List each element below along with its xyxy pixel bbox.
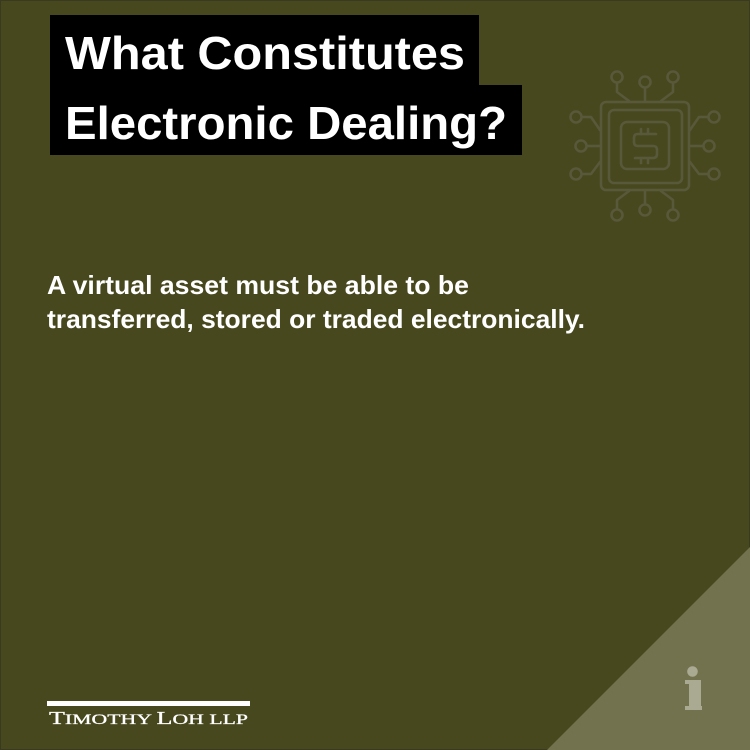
title: Electronic Dealing? — [65, 97, 507, 149]
corner triangle — [547, 547, 750, 750]
logo: Timothy Loh LLP: T IMOTHY L OH LLP — [49, 708, 248, 728]
logo: Timothy Loh LLP — [47, 701, 250, 728]
icon: microchip with dollar sign — [570, 72, 720, 220]
body text — [47, 270, 585, 334]
icon: information letter i — [685, 666, 702, 710]
title — [50, 15, 522, 155]
body text: transferred, stored or traded electronically. — [47, 304, 585, 334]
body text: A virtual asset must be able to be — [47, 270, 469, 300]
title: What Constitutes — [65, 27, 465, 79]
